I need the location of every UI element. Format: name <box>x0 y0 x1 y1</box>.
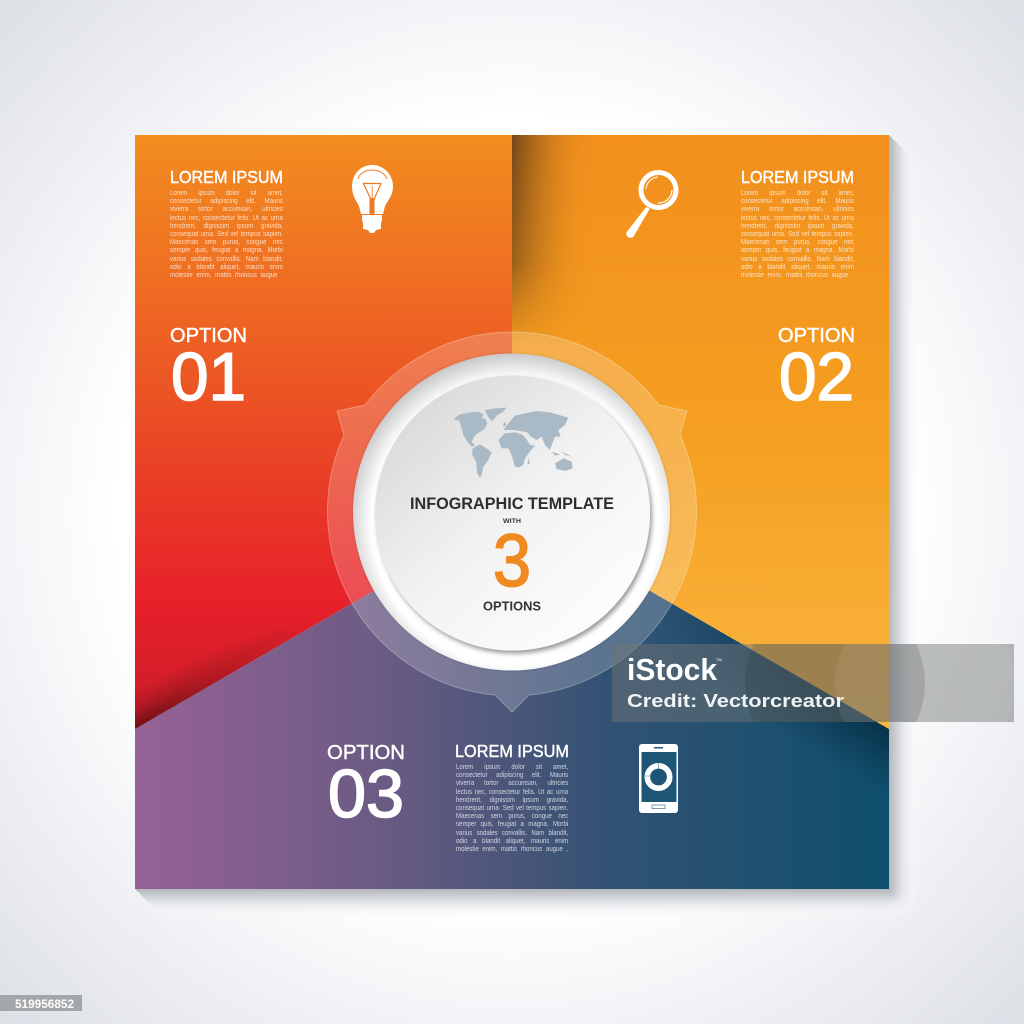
heading: right lorem ipsum: LOREM IPSUM <box>741 167 854 187</box>
text block: left body: consequat urna. Sed vel tempus sapien. <box>170 229 283 238</box>
text block: left body: consectetur adipiscing elit. Mauris <box>170 196 283 205</box>
heading: left lorem ipsum: LOREM IPSUM <box>170 167 283 187</box>
text block: bottom body: consectetur adipiscing elit. Mauris <box>456 770 568 779</box>
text block: left body <box>170 189 283 281</box>
icon: world map <box>453 408 573 478</box>
text block: left body: molestie enim, mattis rhoncus augue . <box>170 270 283 279</box>
text block: right body: semper quis, feugiat a magna. Morbi <box>741 245 854 254</box>
title: infographic template: INFOGRAPHIC TEMPLATE <box>410 494 614 513</box>
panel: option 02 orange <box>512 135 889 729</box>
text block: right body: Maecenas sem purus, congue nec <box>741 237 854 246</box>
text block: right body <box>741 189 854 281</box>
translucent ring with three pointers <box>327 332 697 712</box>
watermark: istock credit: Credit: Vectorcreator <box>627 690 844 711</box>
text block: bottom body: consequat urna. Sed vel tempus sapien. <box>456 803 568 812</box>
text block: left body: Maecenas sem purus, congue nec <box>170 237 283 246</box>
stock id tag <box>0 995 82 1011</box>
text block: bottom body: lectus nec, consectetur felis. Ut ac urna <box>456 787 568 796</box>
text block: bottom body: molestie enim, mattis rhoncus augue . <box>456 844 568 853</box>
text block: right body: odio a blandit aliquet, mauris enim <box>741 262 854 271</box>
text block: bottom body: viverra tortor accumsan, ultricies <box>456 778 568 787</box>
panel: option 01 red <box>135 135 512 729</box>
label: option 03: OPTION <box>327 741 405 764</box>
text block: left body: odio a blandit aliquet, mauris enim <box>170 262 283 271</box>
icon: smartphone <box>639 744 678 813</box>
text block: bottom body: odio a blandit aliquet, mauris enim <box>456 836 568 845</box>
text block: right body: varius sodales convallis. Nam blandit, <box>741 254 854 262</box>
inner paper disc <box>375 376 650 650</box>
text block: right body: molestie enim, mattis rhoncus augue . <box>741 270 854 279</box>
label: option 02: OPTION <box>778 324 855 347</box>
label: option 01: OPTION <box>170 324 247 347</box>
icon: light bulb <box>352 165 393 233</box>
stock id tag: 519956852 <box>15 999 74 1011</box>
label: option 03: 03 <box>328 756 404 832</box>
text block: right body: consequat urna. Sed vel tempus sapien. <box>741 229 854 238</box>
panel: option 03 blue <box>135 511 889 889</box>
number: 3: 3 <box>493 519 531 602</box>
text block: left body: lectus nec, consectetur felis. Ut ac urna <box>170 213 283 222</box>
label: with: WITH <box>503 519 521 525</box>
text block: right body: lectus nec, consectetur felis. Ut ac urna <box>741 213 854 222</box>
text block: left body: semper quis, feugiat a magna. Morbi <box>170 245 283 254</box>
text block: bottom body: Maecenas sem purus, congue nec <box>456 811 568 820</box>
watermark: istock credit <box>612 644 1014 722</box>
heading: bottom lorem ipsum: LOREM IPSUM <box>455 741 569 761</box>
watermark: istock credit: iStock <box>627 652 718 687</box>
text block: left body: hendrerit, dignissim ipsum gravida, <box>170 221 283 230</box>
text block: left body: viverra tortor accumsan, ultricies <box>170 204 283 213</box>
text block: bottom body: hendrerit, dignissim ipsum gravida, <box>456 795 568 804</box>
text block: bottom body: semper quis, feugiat a magna. Morbi <box>456 819 568 828</box>
panel drop shadow <box>135 135 920 920</box>
text block: left body: varius sodales convallis. Nam blandit, <box>170 254 283 262</box>
watermark: istock credit: TM <box>716 657 722 662</box>
text block: bottom body <box>456 763 568 855</box>
text block: right body: consectetur adipiscing elit. Mauris <box>741 196 854 205</box>
label: options: OPTIONS <box>483 598 541 614</box>
label: option 01: 01 <box>171 339 246 415</box>
white outer disc <box>353 354 670 670</box>
text block: bottom body: varius sodales convallis. Nam blandit, <box>456 828 568 836</box>
label: option 02: 02 <box>779 339 854 415</box>
icon: magnifying glass <box>627 172 676 237</box>
text block: right body: viverra tortor accumsan, ultricies <box>741 204 854 213</box>
text block: right body: hendrerit, dignissim ipsum gravida, <box>741 221 854 230</box>
